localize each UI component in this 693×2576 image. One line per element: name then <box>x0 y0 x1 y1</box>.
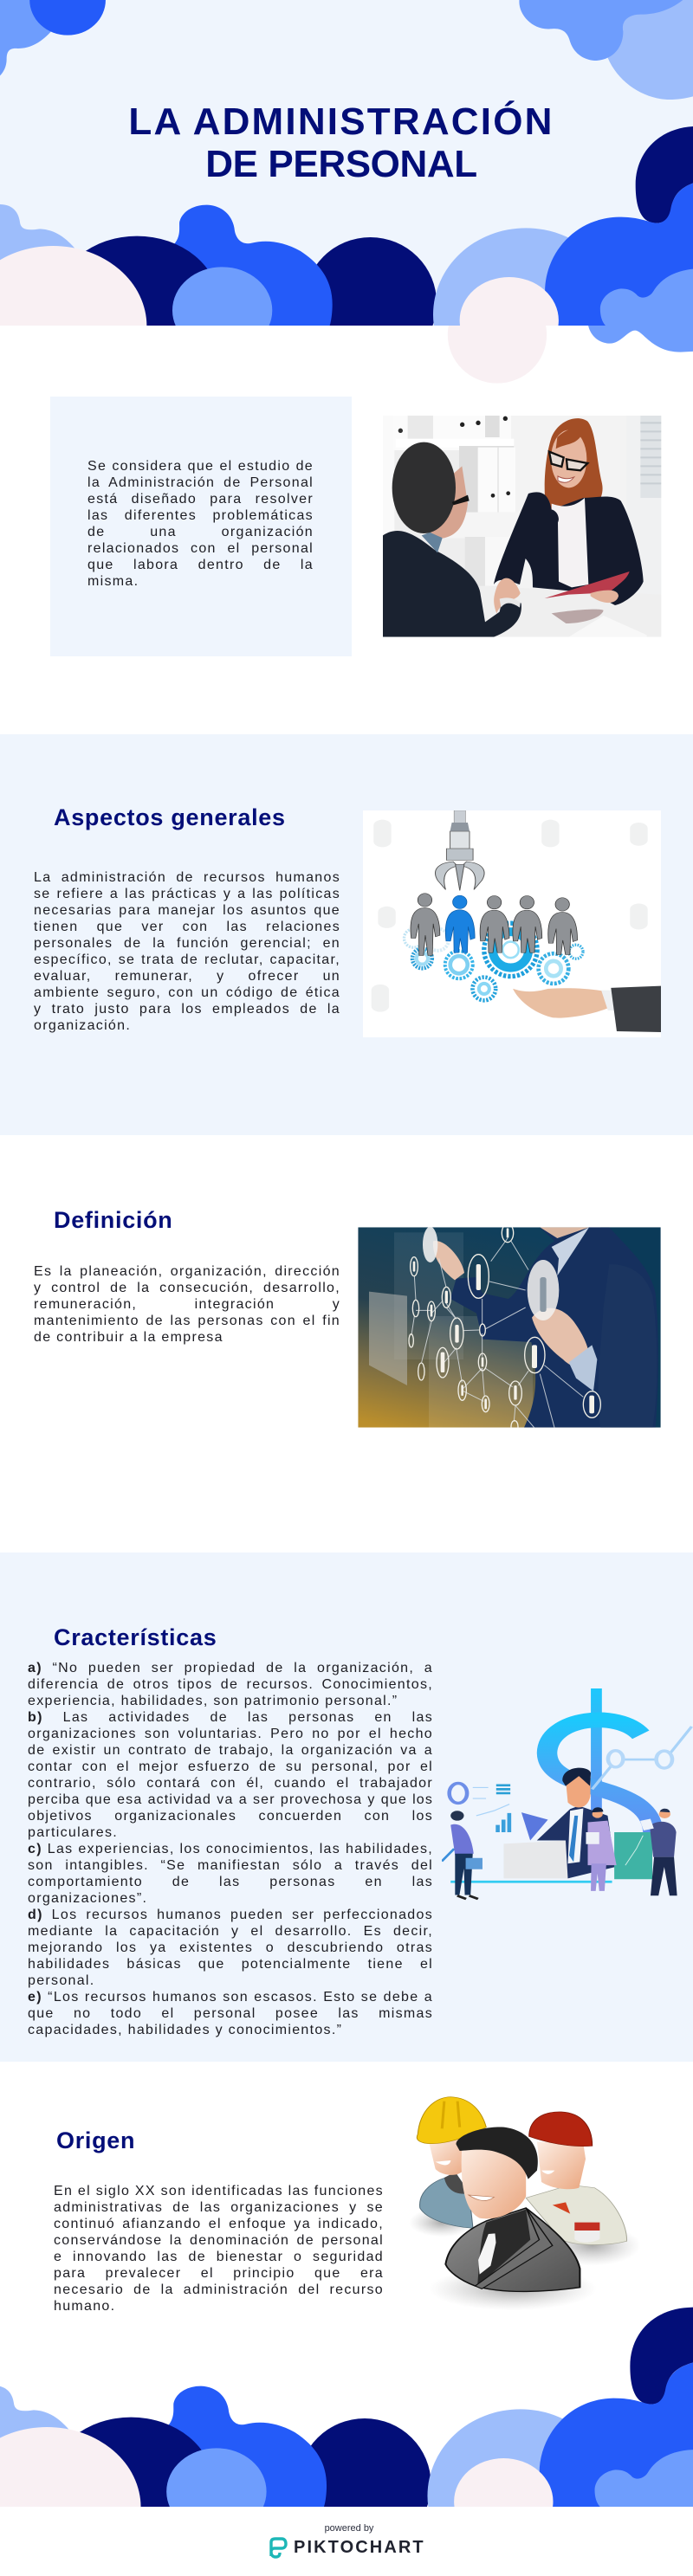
footer: piktochart logo <box>269 2537 425 2559</box>
intro text: Se considera que el estudio de <box>87 459 314 474</box>
body text: definición: mantenimiento de las personas con el fin <box>34 1314 340 1328</box>
body text: aspectos generales <box>34 870 340 1033</box>
body text: origen: conservándose la denominación de personal <box>54 2233 384 2248</box>
body text: características: de existir un contrato de trabajo, la organización va a <box>28 1743 433 1758</box>
header background panel <box>0 0 693 326</box>
body text: características: personal. <box>28 1973 95 1988</box>
illustration: dollar sign and business team <box>442 1688 693 1900</box>
body text: aspectos generales: tienen que ver con las relaciones <box>34 920 340 934</box>
illustration: claw, people and gears <box>363 810 661 1037</box>
footer: powered by: powered by <box>325 2523 373 2534</box>
intro text: las diferentes problemáticas <box>87 508 314 523</box>
body text: características: experiencia, habilidades, son patrimonio personal.” <box>28 1694 398 1708</box>
body text: aspectos generales: La administración de recursos humanos <box>34 870 340 885</box>
body text: origen: continuó afianzando el enfoque ya indicado, <box>54 2217 384 2231</box>
title <box>128 100 554 185</box>
body text: características: contrario, sólo contará con él, cuando el trabajador <box>28 1776 433 1791</box>
decorative blobs: header <box>0 0 693 383</box>
body text: características: e) “Los recursos humanos son escasos. Esto se debe a <box>28 1990 433 2005</box>
heading: aspectos generales: Aspectos generales <box>54 804 286 830</box>
panel: aspectos generales <box>0 734 693 1135</box>
heading: definición: Definición <box>54 1207 173 1233</box>
body text: origen: e innovando las de bienestar o seguridad <box>54 2250 384 2264</box>
heading: origen: Origen <box>56 2127 135 2153</box>
body text: características <box>28 1661 433 2037</box>
body text: origen: En el siglo XX son identificadas las funciones <box>54 2184 384 2198</box>
intro text: relacionados con el personal <box>87 541 314 556</box>
body text: características: comportamiento de las personas en las <box>28 1875 433 1889</box>
decorative blobs: footer <box>0 2307 693 2507</box>
body text: aspectos generales: ambiente seguro, con un código de ética <box>34 985 340 1000</box>
panel: introduction <box>50 397 352 656</box>
intro text: está diseñado para resolver <box>87 492 314 507</box>
body text: definición <box>34 1264 340 1345</box>
body text: aspectos generales: y trato justo para los empleados de la <box>34 1002 340 1017</box>
title: LA ADMINISTRACIÓN <box>128 100 554 143</box>
body text: definición: y control de la consecución, desarrollo, <box>34 1281 340 1295</box>
intro text: de una organización <box>87 525 314 539</box>
heading: características: Cracterísticas <box>54 1624 217 1650</box>
icon: piktochart mark <box>269 2537 288 2559</box>
body text: características: organizaciones”. <box>28 1891 147 1906</box>
body text: características: objetivos organizacionales concuerden con los <box>28 1809 433 1824</box>
body text: características: b) Las actividades de las personas en las <box>28 1710 433 1725</box>
body text: características: contar con el mejor esfuerzo de su personal, por el <box>28 1759 433 1774</box>
title: DE PERSONAL <box>205 143 477 185</box>
body text: origen: para prevalecer el principio que era <box>54 2266 384 2281</box>
body text: características: son intangibles. “Se manifiestan sólo a través del <box>28 1858 433 1873</box>
body text: características: habilidades básicas que potencialmente tiene el <box>28 1957 433 1972</box>
body text: características: a) “No pueden ser propiedad de la organización, a <box>28 1661 433 1675</box>
intro text: misma. <box>87 574 139 589</box>
body text: definición: Es la planeación, organización, dirección <box>34 1264 340 1279</box>
body text: definición: remuneración, integración y <box>34 1297 340 1312</box>
body text: aspectos generales: personales de la función gerencial; en <box>34 936 340 951</box>
body text: aspectos generales: evaluar, remunerar, y ofrecer un <box>34 969 340 984</box>
body text: aspectos generales: necesarias para manejar los asuntos que <box>34 903 340 918</box>
body text: origen <box>54 2184 384 2314</box>
body text: características: perciba que esa actividad va a ser provechosa y que los <box>28 1792 433 1807</box>
intro text: que labora dentro de la <box>87 558 314 572</box>
body text: aspectos generales: se refiere a las prácticas y a las políticas <box>34 887 340 901</box>
wordmark: PIKTOCHART <box>294 2538 425 2557</box>
body text: características: d) Los recursos humanos pueden ser perfeccionados <box>28 1908 433 1922</box>
panel: características <box>0 1553 693 2062</box>
body text: definición: de contribuir a la empresa <box>34 1330 223 1345</box>
photo: handshake interview <box>383 416 662 637</box>
body text: origen: humano. <box>54 2299 115 2314</box>
intro text <box>87 459 314 589</box>
body text: características: capacidades, habilidades y conocimientos.” <box>28 2023 342 2037</box>
photo: businessman with people network <box>358 1227 661 1428</box>
body text: aspectos generales: específico, se trata de reclutar, capacitar, <box>34 952 340 967</box>
body text: características: diferencia de otros tipos de recursos. Conocimientos, <box>28 1677 433 1692</box>
body text: características: organizaciones son voluntarias. Pero no por el hecho <box>28 1727 433 1741</box>
body text: aspectos generales: organización. <box>34 1018 131 1033</box>
body text: origen: administrativas de las organizaciones y se <box>54 2200 384 2215</box>
body text: características: mediante la capacitación y el desarrollo. Es decir, <box>28 1924 433 1939</box>
illustration: three workers <box>414 2096 634 2307</box>
body text: características: c) Las experiencias, los conocimientos, las habilidades, <box>28 1842 433 1856</box>
body text: características: que no todo el personal posee las mismas <box>28 2006 433 2021</box>
body text: características: particulares. <box>28 1825 118 1840</box>
body text: características: mejorando los ya existentes o descubriendo otras <box>28 1940 433 1955</box>
intro text: la Administración de Personal <box>87 475 314 490</box>
body text: origen: necesario de la administración del recurso <box>54 2282 384 2297</box>
